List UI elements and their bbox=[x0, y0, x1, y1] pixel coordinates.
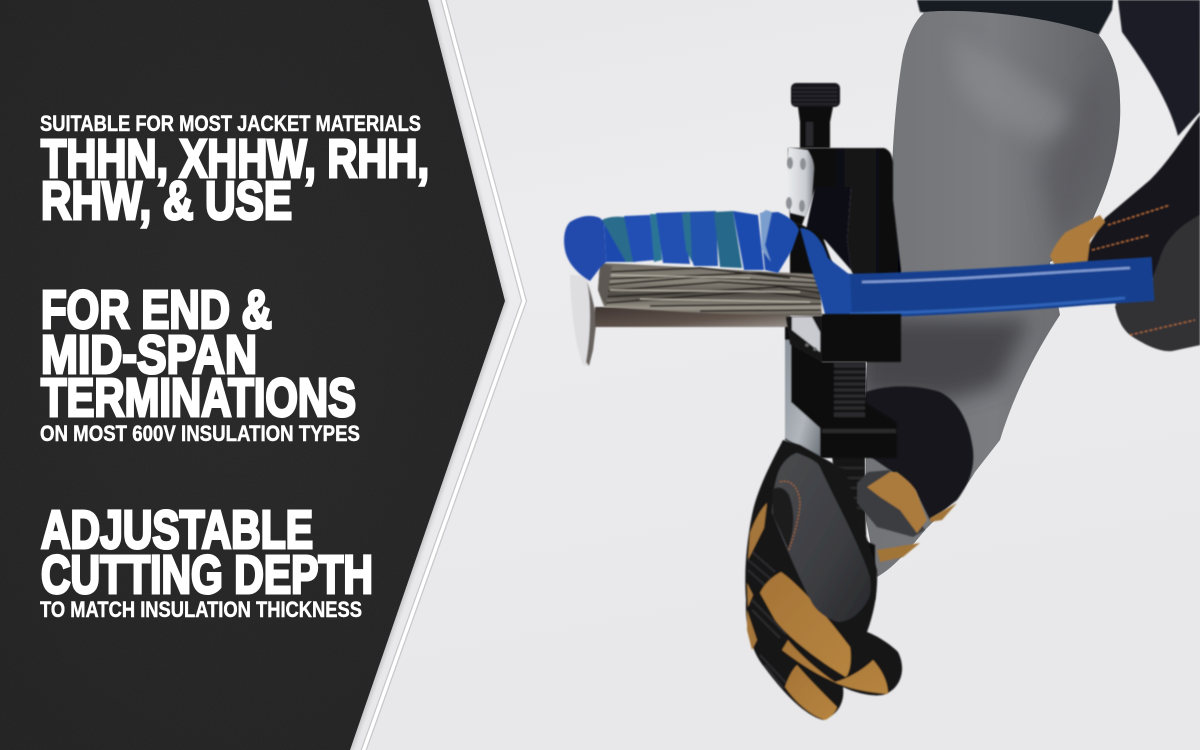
glove: thumb stitching bbox=[780, 481, 800, 550]
tool: silver rivet plate bbox=[786, 147, 814, 217]
blade bbox=[570, 275, 790, 366]
blue cable bbox=[800, 228, 1153, 318]
glove: tan side patches bbox=[747, 503, 767, 650]
glove: tan finger patch two bbox=[782, 640, 888, 694]
tool: thumbscrew knob bbox=[791, 83, 840, 148]
right hand glove bbox=[1050, 115, 1200, 351]
dark chevron panel bbox=[0, 0, 510, 750]
glove: finger ridges bbox=[748, 550, 786, 688]
glove: grey thumb bbox=[772, 453, 871, 622]
glove cuff bbox=[860, 386, 973, 520]
glove: forefinger tan patch bbox=[867, 472, 927, 533]
tool: lower bracket bbox=[785, 317, 897, 460]
tool: lower screw and jaw bbox=[832, 455, 875, 600]
text block: jacket materials bbox=[40, 111, 429, 231]
left hand glove bbox=[745, 440, 927, 720]
stripped conductor wire bbox=[598, 263, 822, 316]
glove: tan finger patch one bbox=[760, 572, 851, 677]
white chevron outline bbox=[363, 0, 524, 750]
text block: terminations: MID-SPAN bbox=[41, 325, 257, 385]
jacket: dark upper sleeve bbox=[917, 0, 1200, 136]
text block: terminations bbox=[40, 280, 360, 446]
glove: forefinger grip bbox=[857, 470, 925, 537]
text block: jacket materials: THHN, XHHW, RHH, bbox=[41, 129, 429, 189]
chevron outline shadow bbox=[363, 0, 524, 750]
text block: cutting depth: CUTTING DEPTH bbox=[41, 545, 373, 605]
glove: black thumb inset bbox=[772, 488, 793, 548]
glove: black fingers bbox=[745, 440, 902, 720]
text block: jacket materials: RHW, & USE bbox=[41, 171, 292, 231]
text block: terminations: FOR END & bbox=[41, 280, 272, 340]
tan finger bits bbox=[877, 503, 957, 562]
lower clamp block bbox=[786, 314, 901, 362]
blue spiral cut jacket bbox=[564, 210, 799, 281]
tool: upper body bbox=[788, 148, 901, 292]
text block: cutting depth bbox=[40, 500, 373, 622]
text block: cutting depth: TO MATCH INSULATION THICKNESS bbox=[40, 597, 362, 622]
text block: jacket materials: SUITABLE FOR MOST JACKET MATERIALS bbox=[40, 111, 421, 136]
glove: tan finger patch three bbox=[785, 665, 837, 720]
sweater arm bbox=[860, 0, 1130, 590]
text block: cutting depth: ADJUSTABLE bbox=[41, 500, 313, 560]
text block: terminations: ON MOST 600V INSULATION TYPES bbox=[40, 421, 360, 446]
text block: terminations: TERMINATIONS bbox=[41, 368, 356, 428]
